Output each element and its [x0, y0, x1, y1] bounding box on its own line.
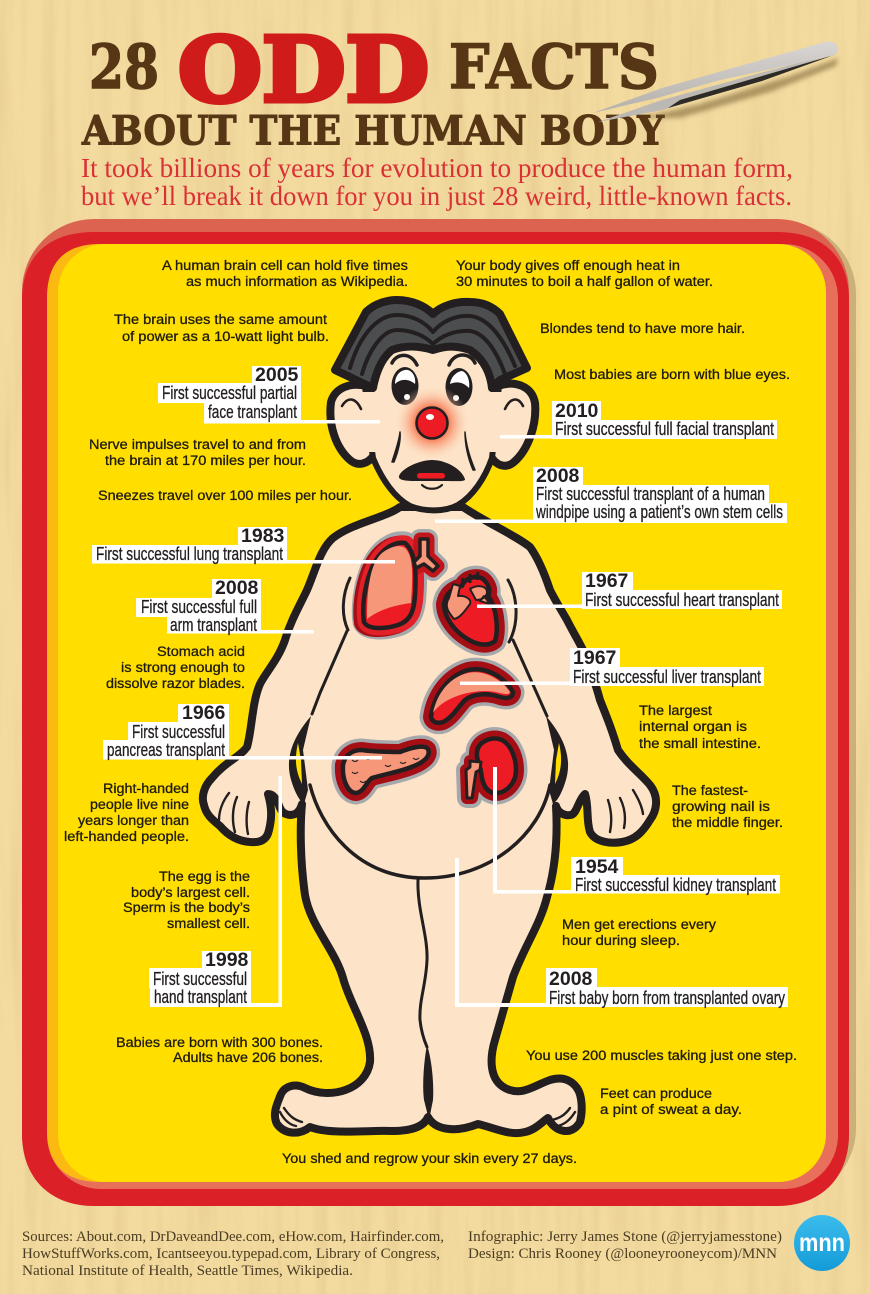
fact: egg and sperm: body’s largest cell.: [131, 885, 250, 900]
credits: [468, 1229, 782, 1262]
text: First successful partial: [162, 383, 297, 403]
sources: Sources: About.com, DrDaveandDee.com, eHow.com, Hairfinder.com,: [22, 1229, 444, 1245]
chin: [422, 485, 442, 489]
leg divider: [418, 880, 427, 1047]
title: ODD: ODD: [178, 17, 429, 122]
transplant: 2005 partial face: [158, 364, 380, 424]
fact: sweat: Feet can produce: [600, 1086, 712, 1101]
fact: skin: You shed and regrow your skin every 27 days.: [282, 1151, 577, 1166]
fact: body heat: Your body gives off enough heat in: [456, 258, 680, 273]
fact: blue eyes: Most babies are born with blue eyes.: [554, 367, 790, 382]
belly curve: [310, 785, 550, 878]
subtitle: [81, 153, 793, 211]
face skin joined to ears: [358, 392, 508, 452]
year: 2008: [215, 577, 259, 599]
organs: [343, 539, 516, 798]
fact: nail: growing nail is: [672, 799, 770, 814]
panel: yellow frame: [22, 219, 856, 1206]
arm gap right: [546, 716, 568, 804]
fact: small intestine: internal organ is: [639, 719, 747, 734]
fact: nail: The fastest-: [672, 783, 748, 798]
fact: erections: Men get erections every: [562, 917, 716, 932]
face outline: [370, 345, 494, 510]
transplant: 2008 arm: [136, 577, 314, 635]
left eye: [392, 367, 418, 405]
fact: small intestine: the small intestine.: [639, 736, 761, 751]
title: 28: 28: [89, 32, 159, 103]
text: windpipe using a patient’s own stem cells: [535, 502, 783, 522]
sources: [22, 1229, 444, 1279]
transplant: 1967 liver: [460, 647, 764, 687]
hair strands: [350, 315, 515, 374]
year: 2008: [549, 968, 593, 990]
arm gap sliver right: [555, 743, 561, 784]
fact: sweat: a pint of sweat a day.: [600, 1102, 742, 1117]
text: First baby born from transplanted ovary: [549, 988, 785, 1008]
year: 2005: [255, 364, 299, 386]
fact: bones: Babies are born with 300 bones.: [116, 1035, 323, 1050]
left ear outline: [330, 385, 374, 464]
fact: bones: Adults have 206 bones.: [173, 1050, 323, 1065]
fact: blondes: Blondes tend to have more hair.: [540, 321, 745, 336]
fact: sweat: [600, 1086, 742, 1117]
text: First successful transplant of a human: [536, 484, 765, 504]
leg wedge: [423, 1045, 433, 1120]
right eye: [446, 368, 472, 406]
credits: Design: Chris Rooney (@looneyrooneycom)/MNN: [468, 1246, 778, 1262]
text: pancreas transplant: [107, 740, 225, 760]
fact: body heat: [456, 258, 713, 289]
transplant: 1967 heart: [477, 570, 782, 610]
year: 1983: [241, 525, 285, 547]
year: 2008: [536, 465, 580, 487]
fact: body heat: 30 minutes to boil a half gallon of water.: [456, 274, 713, 289]
text: First successful lung transplant: [96, 544, 283, 564]
fact: egg and sperm: [123, 869, 250, 931]
transplant: 2010 full facial: [500, 400, 777, 439]
cheek lines: [392, 432, 475, 470]
inner arm and chest lines: [312, 578, 547, 716]
text: First successful kidney transplant: [575, 875, 776, 895]
organ: lung: [361, 539, 438, 629]
title: [81, 17, 664, 154]
text: arm transplant: [170, 615, 257, 635]
year: 2010: [555, 400, 599, 422]
fact: brain power: The brain uses the same amount: [114, 312, 327, 327]
fact: stomach acid: dissolve razor blades.: [106, 676, 245, 691]
body outline: [203, 507, 656, 1133]
text: First successful liver transplant: [573, 667, 761, 687]
fact: small intestine: [639, 703, 761, 751]
fact: nerve impulses: the brain at 170 miles per hour.: [105, 453, 306, 468]
arm gap left: [289, 716, 311, 804]
fact: egg and sperm: smallest cell.: [167, 916, 250, 931]
fact: bones: [116, 1035, 323, 1065]
icon: red nose: [416, 408, 448, 438]
fact: brain cell: [162, 258, 408, 289]
transplant: 1998 hand: [149, 776, 282, 1007]
fact: small intestine: The largest: [639, 703, 712, 718]
fact: right-handed: people live nine: [90, 797, 189, 812]
transplant: 1966 pancreas: [103, 702, 382, 760]
title: FACTS: FACTS: [449, 32, 659, 103]
transplant: 2008 windpipe: [435, 465, 787, 523]
fact: erections: [562, 917, 716, 948]
text: face transplant: [208, 402, 297, 422]
fact: brain cell: A human brain cell can hold five times: [162, 258, 408, 273]
finger and toe lines: [219, 790, 643, 1126]
organ: heart: [444, 572, 497, 645]
organ: kidney: [466, 739, 516, 798]
tongue: [417, 473, 445, 478]
year: 1966: [182, 702, 226, 724]
organ: liver: [431, 669, 513, 723]
transplant: 1983 lung: [92, 525, 395, 564]
text: First successful heart transplant: [585, 590, 779, 610]
transplant: 2008 ovary: [455, 858, 788, 1008]
nose glow: [394, 385, 470, 461]
year: 1967: [573, 647, 616, 669]
credits: Infographic: Jerry James Stone (@jerryjamesstone): [468, 1229, 782, 1245]
fact: nail: the middle finger.: [672, 815, 783, 830]
fact: right-handed: [64, 781, 189, 844]
logo: mnn: mnn: [799, 1229, 845, 1257]
ear curls: [342, 400, 523, 409]
year: 1967: [585, 570, 628, 592]
text: hand transplant: [154, 987, 247, 1007]
right ear outline: [490, 384, 535, 466]
sources: HowStuffWorks.com, Icantseeyou.typepad.com, Library of Congress,: [22, 1246, 440, 1262]
fact: erections: hour during sleep.: [562, 933, 680, 948]
arm gap sliver left: [296, 743, 302, 784]
fact: nerve impulses: Nerve impulses travel to and from: [89, 437, 306, 452]
fact: brain power: [114, 312, 329, 344]
fact: right-handed: Right-handed: [103, 781, 189, 796]
year: 1954: [575, 856, 619, 878]
hair: [335, 300, 527, 388]
eyebrows: [392, 355, 475, 365]
subtitle line 1: It took billions of years for evolution to produce the human form,: [81, 153, 793, 183]
fact: muscles: You use 200 muscles taking just one step.: [526, 1048, 797, 1063]
logo: mnn: [794, 1215, 850, 1271]
transplant: 1954 kidney: [493, 767, 780, 895]
organ: pancreas: [343, 747, 429, 793]
fact: stomach acid: is strong enough to: [121, 660, 245, 675]
sources: National Institute of Health, Seattle Times, Wikipedia.: [22, 1263, 353, 1279]
figure: head: [330, 300, 535, 510]
fact: stomach acid: Stomach acid: [157, 644, 245, 659]
mouth: [399, 460, 465, 481]
fact: stomach acid: [106, 644, 245, 691]
fact: brain cell: as much information as Wikipedia.: [186, 274, 408, 289]
text: First successful: [153, 969, 247, 989]
title: about the human body: ABOUT THE HUMAN BODY: [81, 108, 664, 154]
fact: egg and sperm: The egg is the: [159, 869, 250, 884]
fact: right-handed: years longer than: [78, 813, 189, 828]
fact: egg and sperm: Sperm is the body’s: [123, 900, 250, 915]
text: First successful full: [141, 597, 257, 617]
fact: nail: [672, 783, 783, 830]
text: First successful full facial transplant: [555, 419, 774, 439]
figure: human body: [203, 507, 656, 1133]
text: First successful: [132, 722, 225, 742]
subtitle line 2: but we’ll break it down for you in just 28 weird, little-known facts.: [81, 181, 792, 211]
fact: nerve impulses: [89, 437, 306, 468]
icon: tweezers: [593, 42, 838, 122]
fact: sneezes: Sneezes travel over 100 miles per hour.: [98, 488, 352, 503]
year: 1998: [205, 949, 249, 971]
fact: right-handed: left-handed people.: [64, 829, 189, 844]
fact: brain power: of power as a 10-watt light bulb.: [122, 329, 329, 344]
